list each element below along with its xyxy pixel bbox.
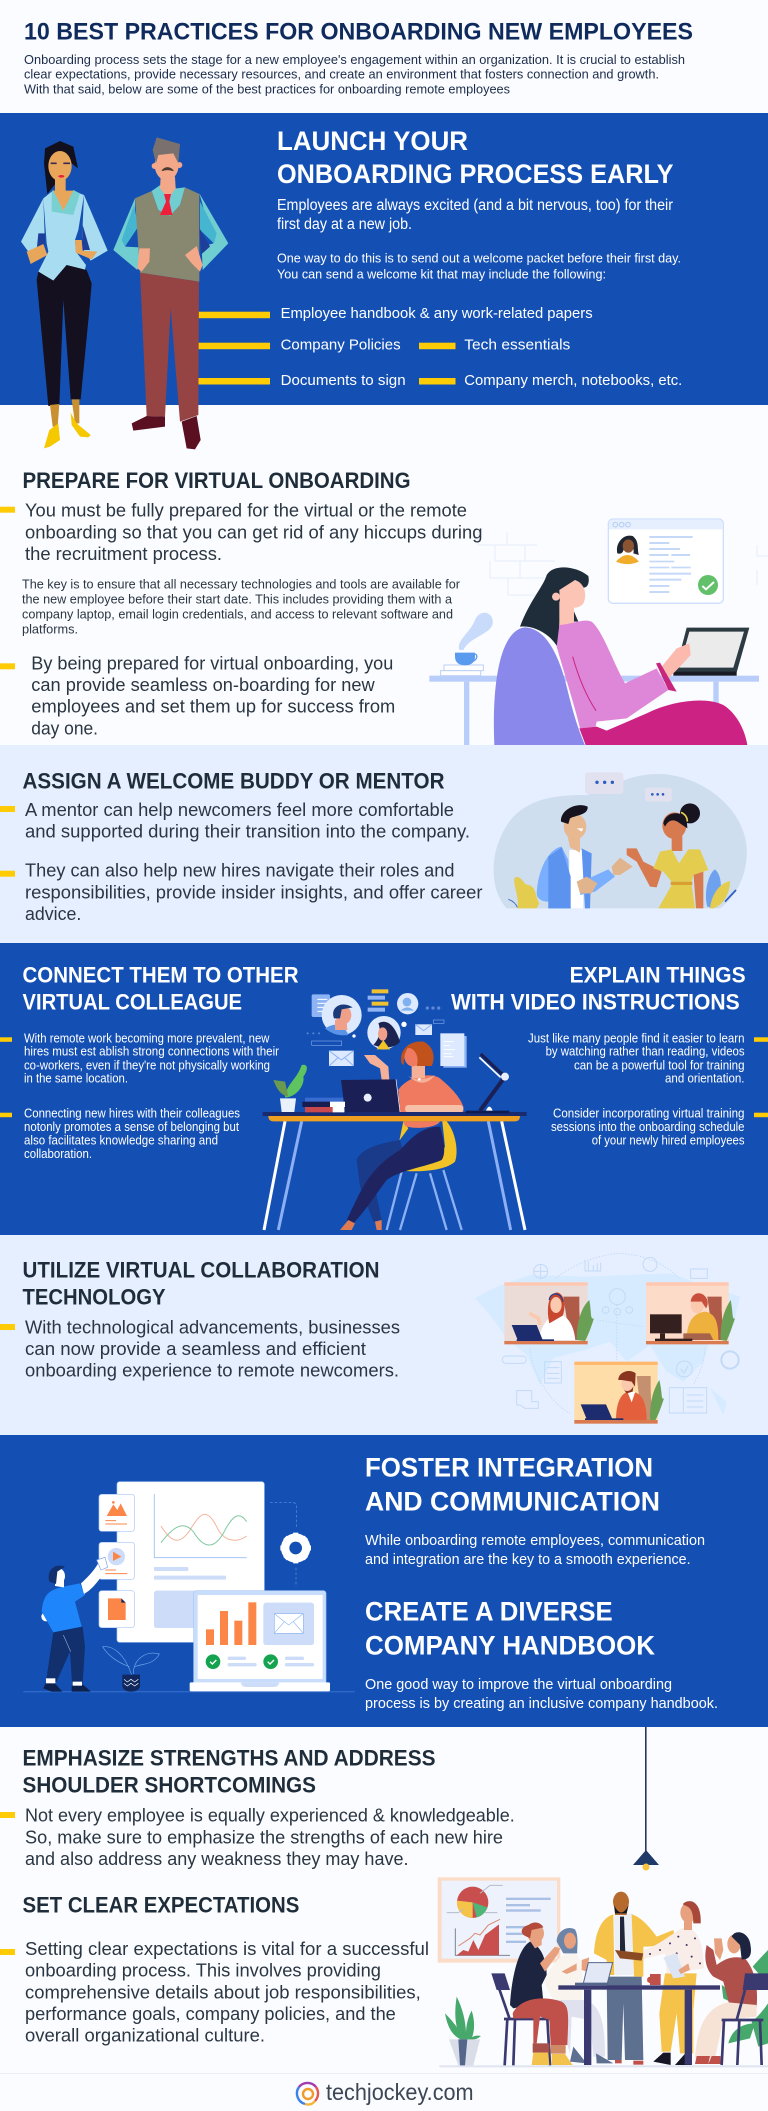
laptop and mug — [575, 1963, 661, 1985]
panel: prepare for virtual onboarding — [0, 405, 768, 745]
heading: connect: VIRTUAL COLLEAGUE — [22, 989, 242, 1014]
heading: explain: EXPLAIN THINGS — [570, 962, 746, 987]
illustration: team meeting — [438, 1877, 768, 2067]
panel: emphasize strengths and set expectations — [0, 1727, 768, 2073]
laptop dashboard — [190, 1591, 330, 1691]
heading: launch — [277, 126, 674, 189]
desk — [429, 676, 759, 745]
illustration: dashboard and person — [23, 1482, 355, 1692]
heading: expectations: SET CLEAR EXPECTATIONS — [22, 1893, 299, 1918]
woman — [494, 567, 747, 745]
man — [113, 137, 228, 449]
laptop — [673, 628, 749, 676]
panel: foster integration and diverse handbook — [0, 1435, 768, 1727]
text: connecting hires: collaboration. — [24, 1147, 92, 1161]
marker — [0, 663, 15, 669]
heading: connect — [22, 962, 299, 1014]
text: fully prepared: the recruitment process. — [25, 544, 222, 564]
text: seamless on-boarding — [31, 653, 395, 738]
floating icons — [307, 989, 467, 1068]
heading: diverse handbook — [365, 1597, 655, 1661]
woman — [340, 1041, 463, 1230]
heading: strengths — [22, 1745, 436, 1797]
text: inclusive handbook: One good way to improve the virtual onboarding — [365, 1677, 672, 1693]
plant left — [445, 1997, 481, 2065]
heading: foster integration: FOSTER INTEGRATION — [365, 1453, 653, 1483]
text: remote work — [24, 1031, 279, 1086]
text: technological advancements — [25, 1317, 400, 1381]
text: video learning: can be a powerful tool for training — [574, 1058, 745, 1072]
gear — [270, 1502, 311, 1587]
marker — [0, 1113, 12, 1117]
text: navigate roles — [25, 861, 482, 924]
main document — [117, 1482, 264, 1642]
text: video learning — [528, 1031, 745, 1086]
intro text: With that said, below are some of the best practices for onboarding remote employees — [24, 82, 510, 97]
marker — [0, 1949, 15, 1955]
text: mentor helps: and supported during their transition into the company. — [25, 822, 470, 842]
text: key technologies — [22, 576, 461, 636]
desk legs — [264, 1121, 525, 1230]
text: employees excited: Employees are always excited (and a bit nervous, too) for their — [277, 197, 673, 214]
text: remote work: With remote work becoming more prevalent, new — [24, 1031, 270, 1045]
woman seated with grey hair — [544, 1928, 613, 2063]
text: virtual training: sessions into the onboarding schedule — [551, 1120, 745, 1134]
plant — [273, 1065, 307, 1112]
text: strengths: So, make sure to emphasize the strengths of each new hire — [25, 1827, 503, 1847]
text: virtual training — [551, 1107, 745, 1148]
bullet list: welcome kit: Company Policies — [281, 338, 401, 354]
marker — [754, 1037, 768, 1042]
books — [302, 1098, 345, 1112]
man seated — [510, 1922, 573, 2065]
woman seated right — [695, 1932, 757, 2064]
plants — [508, 869, 736, 908]
title: 10 BEST PRACTICES FOR ONBOARDING NEW EMPLOYEES — [24, 18, 693, 46]
heading: collaboration: TECHNOLOGY — [22, 1285, 166, 1310]
chair right — [722, 1973, 768, 2065]
text: seamless on-boarding: employees and set them up for success from — [31, 697, 395, 717]
laptop — [341, 1079, 400, 1112]
text: key technologies: The key is to ensure that all necessary technologies and tools are available for — [22, 576, 461, 591]
text: fully prepared — [25, 501, 482, 564]
world map — [475, 1273, 740, 1415]
text: expectations: onboarding process. This involves providing — [25, 1961, 381, 1981]
standing man — [594, 1892, 675, 2065]
text: technological advancements: can now provide a seamless and efficient — [25, 1339, 366, 1359]
text: mentor helps — [25, 800, 470, 842]
side cards — [99, 1494, 134, 1628]
illustration: video collaboration map — [475, 1253, 740, 1424]
text: virtual training: of your newly hired employees — [592, 1134, 744, 1148]
text: technological advancements: With technological advancements, businesses — [25, 1317, 400, 1337]
chair left — [495, 1977, 552, 2065]
illustration: woman at laptop — [429, 519, 759, 745]
intro text: Onboarding process sets the stage for a new employee's engagement within an organization. It is crucial to establish — [24, 52, 685, 67]
marker — [0, 871, 15, 877]
speech bubbles — [585, 772, 672, 802]
text: inclusive handbook: process is by creating an inclusive company handbook. — [365, 1696, 718, 1712]
text: key technologies: company laptop, email login credentials, and access to relevant software and — [22, 606, 453, 621]
heading: connect: CONNECT THEM TO OTHER — [22, 962, 299, 987]
header — [24, 18, 693, 97]
text: employees excited: first day at a new job. — [277, 216, 412, 233]
marker — [0, 507, 15, 513]
illustration: woman at desk — [263, 989, 527, 1230]
text: seamless on-boarding: day one. — [31, 718, 98, 738]
desk top — [263, 1112, 527, 1121]
footer — [0, 2073, 768, 2111]
text: fully prepared: onboarding so that you can get rid of any hiccups during — [25, 522, 482, 542]
illustration: mentor conversation — [494, 772, 747, 908]
heading: foster integration: AND COMMUNICATION — [365, 1487, 660, 1517]
text: communication: While onboarding remote employees, communication — [365, 1533, 705, 1549]
bullet list: welcome kit: Employee handbook & any work-related papers — [281, 306, 593, 322]
text: expectations: overall organizational culture. — [25, 2026, 265, 2046]
text: communication: and integration are the key to a smooth experience. — [365, 1552, 691, 1568]
panel: launch your onboarding process early — [0, 113, 768, 405]
panel: connect and explain — [0, 943, 768, 1235]
text: inclusive handbook — [365, 1677, 718, 1712]
text: remote work: co-workers, even if they're not physically working — [24, 1058, 270, 1072]
profile card — [608, 519, 723, 603]
heading: mentor: ASSIGN A WELCOME BUDDY OR MENTOR — [22, 768, 445, 793]
marker — [0, 1324, 15, 1330]
text: video learning: Just like many people find it easier to learn — [528, 1031, 745, 1045]
standing woman — [643, 1901, 704, 2065]
text: expectations: Setting clear expectations is vital for a successful — [25, 1939, 429, 1959]
text: video learning: by watching rather than reading, videos — [546, 1045, 745, 1059]
man — [537, 805, 633, 908]
text: video learning: and orientation. — [665, 1072, 744, 1086]
text: expectations: performance goals, company policies, and the — [25, 2004, 396, 2024]
presentation board — [438, 1877, 560, 1963]
heading: explain: WITH VIDEO INSTRUCTIONS — [451, 989, 740, 1014]
text: communication — [365, 1533, 705, 1568]
heading: explain — [451, 962, 746, 1014]
text: employees excited — [277, 197, 673, 233]
illustration: two colleagues standing — [21, 137, 228, 449]
heading: collaboration: UTILIZE VIRTUAL COLLABORATION — [22, 1258, 380, 1283]
text: key technologies: platforms. — [22, 621, 78, 636]
text: connecting hires — [24, 1107, 240, 1161]
text: strengths: and also address any weakness they may have. — [25, 1849, 408, 1869]
plant right — [722, 1950, 768, 2047]
text: mentor helps: A mentor can help newcomers feel more comfortable — [25, 800, 454, 820]
text: strengths — [25, 1806, 515, 1869]
text: remote work: hires must est ablish strong connections with their — [24, 1045, 279, 1059]
text: navigate roles: advice. — [25, 904, 81, 924]
panel: assign a welcome buddy or mentor — [0, 745, 768, 943]
icon: pendant lamp — [633, 1727, 659, 1870]
text: remote work: in the same location. — [24, 1072, 128, 1086]
text: seamless on-boarding: can provide seamless on-boarding for new — [31, 675, 376, 695]
heading: collaboration — [22, 1258, 380, 1310]
text: welcome packet: One way to do this is to send out a welcome packet before their first day. — [277, 251, 681, 266]
coffee and books — [441, 613, 493, 676]
text: seamless on-boarding: By being prepared for virtual onboarding, you — [31, 653, 393, 673]
text: key technologies: the new employee before their start date. This includes providing them with a — [22, 591, 453, 606]
icon: techjockey logo — [297, 2083, 318, 2105]
text: expectations: comprehensive details about job responsibilities, — [25, 1982, 421, 2002]
bullet list: welcome kit: Company merch, notebooks, etc. — [464, 373, 682, 389]
text: connecting hires: also facilitates knowledge sharing and — [24, 1134, 218, 1148]
text: connecting hires: Connecting new hires with their colleagues — [24, 1107, 240, 1121]
woman — [627, 803, 708, 908]
text: strengths: Not every employee is equally experienced & knowledgeable. — [25, 1806, 515, 1826]
bullet list: welcome kit — [198, 306, 682, 389]
plant pot — [122, 1675, 140, 1692]
text: welcome packet — [277, 251, 681, 282]
heading: strengths: EMPHASIZE STRENGTHS AND ADDRESS — [22, 1745, 436, 1770]
heading: launch: LAUNCH YOUR — [277, 126, 468, 156]
text: welcome packet: You can send a welcome kit that may include the following: — [277, 267, 606, 282]
video call 1 — [504, 1282, 594, 1344]
text: fully prepared: You must be fully prepared for the virtual or the remote — [25, 501, 467, 521]
chair back left — [491, 1973, 510, 1990]
connection lines and icons — [502, 1253, 739, 1413]
video call 3 — [574, 1362, 664, 1424]
text: technological advancements: onboarding experience to remote newcomers. — [25, 1361, 399, 1381]
heading: diverse handbook: COMPANY HANDBOOK — [365, 1631, 655, 1661]
text: navigate roles: responsibilities, provide insider insights, and offer career — [25, 882, 482, 902]
table — [558, 1985, 720, 2065]
text: virtual training: Consider incorporating virtual training — [553, 1107, 745, 1121]
heading: diverse handbook: CREATE A DIVERSE — [365, 1597, 613, 1627]
marker — [0, 806, 15, 812]
text: connecting hires: notonly promotes a sense of belonging but — [24, 1120, 239, 1134]
heading: strengths: SHOULDER SHORTCOMINGS — [22, 1772, 316, 1797]
bullet list: welcome kit: Documents to sign — [281, 373, 406, 389]
heading: foster integration — [365, 1453, 660, 1517]
panel: utilize virtual collaboration technology — [0, 1235, 768, 1435]
marker — [0, 1812, 15, 1818]
marker — [0, 1037, 12, 1042]
chair — [387, 1100, 462, 1230]
heading: launch: ONBOARDING PROCESS EARLY — [277, 159, 674, 189]
intro text: clear expectations, provide necessary resources, and create an environment that fosters connection and growth. — [24, 67, 659, 82]
heading: prepare: PREPARE FOR VIRTUAL ONBOARDING — [22, 468, 410, 493]
floor — [439, 2065, 768, 2067]
desk lamp — [466, 1054, 509, 1113]
text: navigate roles: They can also help new hires navigate their roles and — [25, 861, 454, 881]
intro text — [24, 52, 685, 97]
text: expectations — [25, 1939, 429, 2046]
bullet list: welcome kit: Tech essentials — [464, 338, 570, 354]
video call 2 — [646, 1282, 735, 1344]
person — [41, 1557, 108, 1692]
woman — [21, 141, 108, 448]
plant — [103, 1647, 159, 1675]
brand name: techjockey.com — [326, 2079, 474, 2105]
marker — [754, 1113, 768, 1117]
